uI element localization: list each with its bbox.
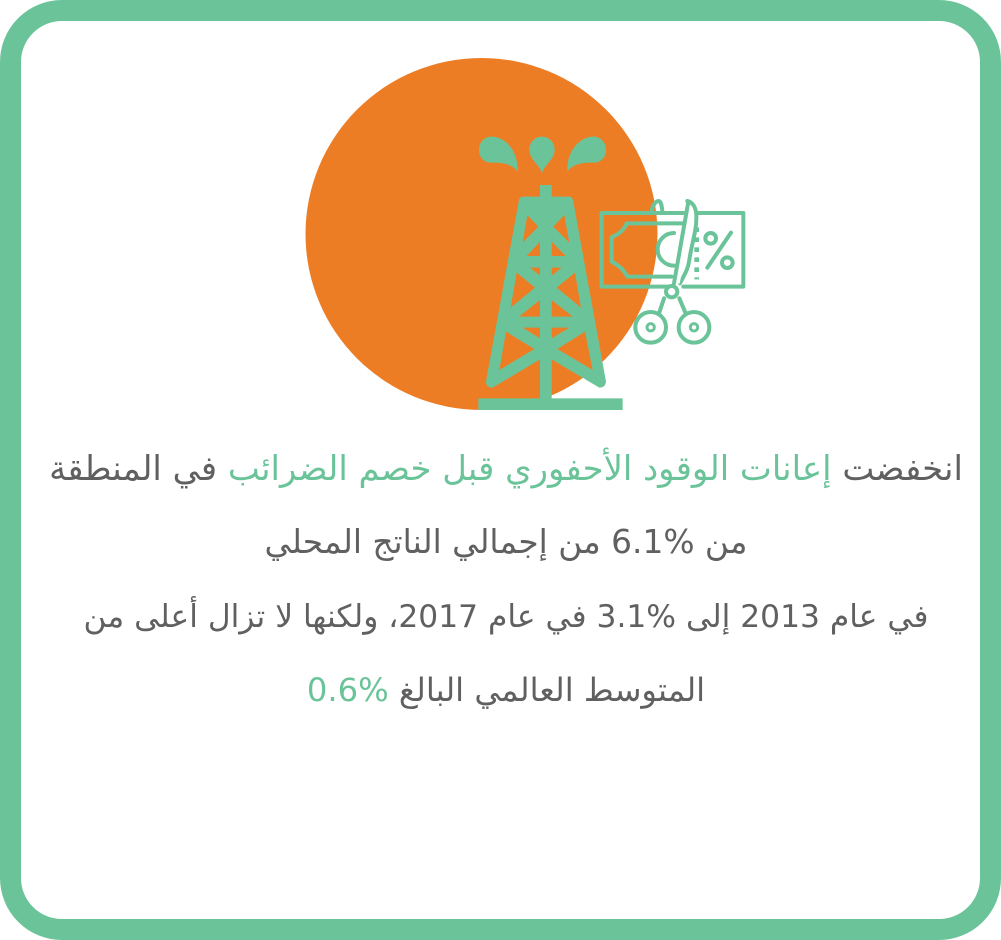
icon: oil derrick: [478, 185, 623, 410]
icon: oil drops: [479, 137, 606, 173]
orange circle: [306, 58, 658, 410]
text line 1: انخفضت إعانات الوقود الأحفوري قبل خصم الضرائب في المنطقة: [49, 449, 963, 488]
icon: banknote and percent tag cut by scissors: [602, 201, 743, 343]
text line 2: من 6.1% من إجمالي الناتج المحلي: [265, 523, 747, 561]
icon group in zoomed coordinates: [478, 137, 743, 410]
text line 4: المتوسط العالمي البالغ 0.6%: [307, 671, 705, 709]
text line 3: في عام 2013 إلى 3.1% في عام 2017، ولكنها لا تزال أعلى من: [84, 599, 928, 635]
